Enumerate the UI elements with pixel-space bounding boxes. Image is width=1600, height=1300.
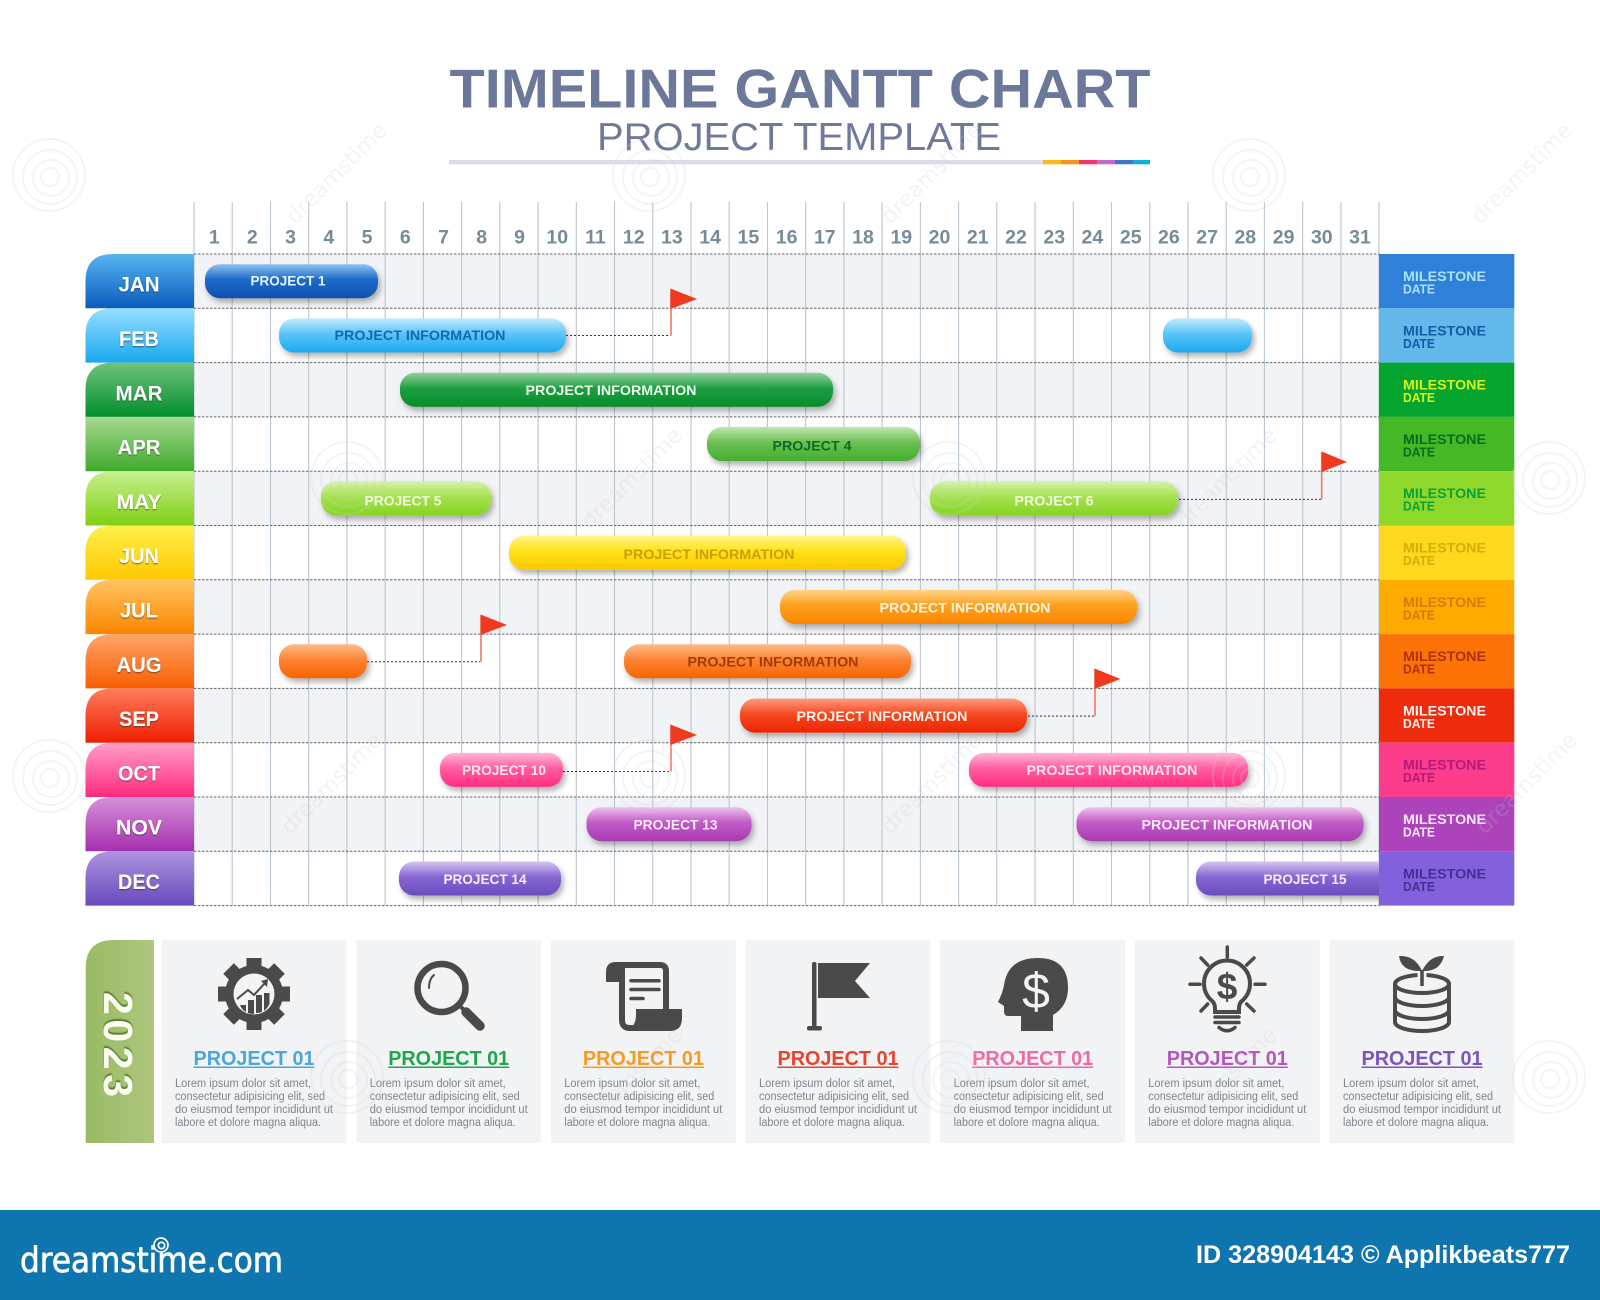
bar: july project information [780, 590, 1137, 624]
description: consectetur adipisicing elit, sed [564, 1091, 714, 1103]
month tab: jan: JAN [118, 274, 160, 297]
milestone: oct [1379, 743, 1514, 797]
month tab: feb [86, 308, 194, 363]
day numbers: 4 [323, 226, 334, 248]
month tab: oct: OCT [118, 762, 160, 785]
day numbers: 6 [400, 226, 411, 248]
bar: october project information: PROJECT INFORMATION [1026, 762, 1198, 778]
icon: head with dollar sign [998, 958, 1068, 1031]
month tab: jun: JUN [119, 545, 159, 568]
bar: august project information: PROJECT INFORMATION [688, 654, 858, 670]
day numbers: 24 [1082, 226, 1103, 248]
bar: september project information [740, 699, 1027, 733]
day numbers: 28 [1234, 226, 1256, 248]
milestone: may [1379, 471, 1514, 526]
description [370, 1078, 528, 1129]
heading: PROJECT 01 [388, 1047, 509, 1070]
milestone: may: DATE [1403, 500, 1435, 514]
project card 1 [162, 940, 346, 1143]
bar: july project information: PROJECT INFORMATION [880, 599, 1050, 615]
heading: PROJECT 01 [778, 1047, 898, 1070]
bar: project 10 [440, 753, 563, 787]
month tab: aug: AUG [116, 654, 162, 677]
milestone: jul: DATE [1403, 608, 1435, 622]
bar: march project information [400, 373, 833, 407]
project card 2 [356, 940, 541, 1143]
day numbers: 26 [1158, 226, 1180, 248]
title block [449, 58, 1150, 164]
day numbers: 19 [890, 226, 912, 248]
bar: august short [279, 644, 367, 678]
milestone: oct: MILESTONE [1403, 758, 1486, 773]
month tab: jun [86, 526, 194, 580]
bar: october project information [969, 753, 1248, 787]
month tab: mar [86, 363, 194, 417]
day numbers: 27 [1196, 226, 1218, 248]
watermark overlay: dreamstime [877, 728, 988, 839]
month tab: feb: FEB [119, 328, 159, 351]
bar: project 1 [205, 264, 378, 298]
milestone: sep: DATE [1403, 717, 1435, 731]
watermark overlay: dreamstime [1467, 118, 1578, 229]
day numbers: 1 [209, 226, 220, 248]
title underline [449, 160, 1150, 164]
milestone: dec: DATE [1403, 880, 1435, 894]
day numbers [209, 226, 1371, 248]
milestone: jun: DATE [1403, 554, 1435, 568]
milestone: jan: MILESTONE [1403, 269, 1486, 284]
bar: february project information: PROJECT INFORMATION [334, 327, 506, 343]
project card 4 [746, 940, 930, 1143]
heading: PROJECT 01 [194, 1047, 314, 1070]
description [1343, 1078, 1502, 1129]
month tab: sep [86, 688, 194, 743]
milestone: feb: DATE [1403, 337, 1435, 351]
milestone: may: MILESTONE [1403, 486, 1486, 501]
month tab: jul: JUL [120, 600, 158, 622]
icon: magnifying glass [418, 964, 480, 1026]
description: do eiusmod tempor incididunt ut [1148, 1104, 1307, 1116]
description: labore et dolore magna aliqua. [175, 1117, 321, 1129]
milestone: aug: DATE [1403, 663, 1435, 677]
day numbers: 7 [438, 226, 449, 248]
milestone: mar: DATE [1403, 391, 1435, 405]
day numbers: 16 [776, 226, 798, 248]
day numbers: 22 [1005, 226, 1027, 248]
bar: project 13 [586, 807, 752, 841]
bar: project 10: PROJECT 10 [462, 762, 546, 778]
milestone: dec: MILESTONE [1403, 866, 1486, 881]
bar: project 4 [707, 427, 920, 461]
description: Lorem ipsum dolor sit amet, [759, 1078, 895, 1090]
description: do eiusmod tempor incididunt ut [954, 1104, 1112, 1116]
icon: gear with chart [218, 958, 290, 1030]
month tab: apr: APR [118, 437, 160, 460]
bar: project 4: PROJECT 4 [772, 438, 852, 454]
description: labore et dolore magna aliqua. [564, 1117, 710, 1129]
month tab: apr [86, 417, 194, 471]
bar: project 5: PROJECT 5 [364, 492, 442, 508]
watermark overlay: dreamstime [277, 728, 388, 839]
bar: november project information [1076, 807, 1364, 841]
description: do eiusmod tempor incididunt ut [759, 1104, 918, 1116]
bar: march project information: PROJECT INFORMATION [526, 382, 696, 398]
bar: project 13: PROJECT 13 [634, 816, 718, 832]
heading: PROJECT 01 [1167, 1047, 1288, 1070]
description [1148, 1078, 1307, 1129]
milestone flag: august [367, 614, 507, 662]
day numbers: 30 [1311, 226, 1333, 248]
milestone: aug: MILESTONE [1403, 649, 1486, 664]
description: consectetur adipisicing elit, sed [759, 1091, 909, 1103]
heading: PROJECT 01 [972, 1047, 1093, 1070]
watermark overlay: dreamstime [1172, 1023, 1283, 1134]
milestone: nov: MILESTONE [1403, 812, 1486, 827]
milestone: jan: DATE [1403, 282, 1435, 296]
watermark overlay: dreamstime [1172, 423, 1283, 534]
milestone: jul: MILESTONE [1403, 595, 1486, 610]
description: labore et dolore magna aliqua. [1343, 1117, 1489, 1129]
milestone flag: may [1179, 452, 1347, 499]
bar: project 15 [1196, 862, 1396, 896]
milestone: mar [1379, 363, 1514, 417]
day numbers: 3 [285, 226, 296, 248]
day numbers: 12 [623, 226, 645, 248]
milestone: jun: MILESTONE [1403, 540, 1486, 556]
milestone: apr: MILESTONE [1403, 432, 1486, 447]
day numbers: 15 [738, 226, 759, 248]
month tab: jan [86, 254, 194, 308]
footer bar [0, 1210, 1600, 1300]
day numbers: 9 [514, 226, 525, 248]
year panel: 2023 [95, 992, 141, 1097]
project card 7 [1330, 940, 1514, 1143]
icon: coin stack with sprout [1395, 956, 1449, 1031]
day numbers: 29 [1273, 226, 1295, 248]
milestone: dec [1379, 851, 1514, 906]
heading: PROJECT 01 [583, 1047, 704, 1070]
bar: project 1: PROJECT 1 [250, 273, 326, 289]
bar: november project information: PROJECT INFORMATION [1142, 816, 1312, 832]
icon: flag [807, 962, 870, 1030]
icon: paper scroll [606, 962, 682, 1031]
project card 5 [940, 940, 1125, 1143]
watermark overlay: dreamstime [1472, 728, 1583, 839]
bar: february project information [279, 318, 566, 352]
month tab: nov: NOV [116, 817, 162, 840]
month tab: aug [86, 634, 194, 688]
description: Lorem ipsum dolor sit amet, [954, 1078, 1090, 1090]
heading: PROJECT 01 [1362, 1047, 1482, 1070]
description: do eiusmod tempor incididunt ut [564, 1104, 723, 1116]
description: Lorem ipsum dolor sit amet, [1148, 1078, 1284, 1090]
day numbers: 10 [546, 226, 568, 248]
month tab: dec: DEC [118, 871, 160, 894]
milestone: feb [1379, 308, 1514, 363]
milestone: sep [1379, 688, 1514, 743]
icon: light bulb with dollar sign [1190, 947, 1265, 1031]
month tab: may: MAY [116, 491, 162, 514]
title: TIMELINE GANTT CHART [450, 58, 1150, 120]
year panel [86, 940, 154, 1143]
day numbers: 11 [585, 226, 606, 248]
milestone flag: february [566, 288, 697, 336]
day numbers: 18 [852, 226, 874, 248]
milestone: apr [1379, 417, 1514, 471]
description: consectetur adipisicing elit, sed [1343, 1091, 1493, 1103]
milestone: nov [1379, 797, 1514, 851]
icon: light bulb with dollar sign: $ [1217, 966, 1238, 1007]
month tab: jul [86, 580, 194, 634]
description: labore et dolore magna aliqua. [370, 1117, 516, 1129]
bar: august project information [624, 644, 911, 678]
subtitle: PROJECT TEMPLATE [597, 116, 1001, 159]
milestone: jul [1379, 580, 1514, 634]
milestone: aug [1379, 634, 1514, 688]
description: labore et dolore magna aliqua. [954, 1117, 1100, 1129]
description: do eiusmod tempor incididunt ut [1343, 1104, 1502, 1116]
milestone flag: october [563, 724, 697, 772]
description [954, 1078, 1112, 1129]
bar: project 14: PROJECT 14 [444, 871, 527, 887]
watermark overlay [13, 118, 1585, 1134]
day numbers: 8 [476, 226, 487, 248]
milestone: oct: DATE [1403, 771, 1435, 785]
month tab: may [86, 471, 194, 526]
milestone: apr: DATE [1403, 445, 1435, 459]
month tab: oct [86, 743, 194, 797]
description: Lorem ipsum dolor sit amet, [175, 1078, 311, 1090]
footer logo spiral [154, 1238, 168, 1252]
bar: project 5 [321, 481, 491, 515]
project card 3 [551, 940, 736, 1143]
day numbers: 2 [247, 226, 258, 248]
bar: project 14 [399, 862, 561, 896]
day numbers: 25 [1120, 226, 1142, 248]
day numbers: 13 [661, 226, 683, 248]
watermark overlay: dreamstime [877, 118, 988, 229]
description: labore et dolore magna aliqua. [1148, 1117, 1294, 1129]
milestone: sep: MILESTONE [1403, 703, 1486, 718]
bar: project 6: PROJECT 6 [1014, 492, 1094, 508]
milestone: jan [1379, 254, 1514, 308]
day numbers: 17 [814, 226, 836, 248]
milestone: mar: MILESTONE [1403, 378, 1486, 393]
description: Lorem ipsum dolor sit amet, [564, 1078, 700, 1090]
row backgrounds [194, 254, 1379, 851]
description: do eiusmod tempor incididunt ut [370, 1104, 528, 1116]
gantt chart [86, 202, 1514, 906]
bar: project 6 [930, 481, 1178, 515]
project card 6 [1135, 940, 1320, 1143]
milestone: jun [1379, 526, 1514, 580]
bar: september project information: PROJECT INFORMATION [796, 708, 968, 724]
icon: head with dollar sign: $ [1022, 963, 1050, 1019]
description: consectetur adipisicing elit, sed [370, 1091, 520, 1103]
description: Lorem ipsum dolor sit amet, [370, 1078, 506, 1090]
month tab: dec [86, 851, 194, 906]
day numbers: 20 [929, 226, 950, 248]
milestone: nov: DATE [1403, 826, 1435, 840]
day numbers: 14 [699, 226, 721, 248]
description [564, 1078, 723, 1129]
month tab: sep: SEP [119, 708, 159, 731]
month tab: nov [86, 797, 194, 851]
description: do eiusmod tempor incididunt ut [175, 1104, 334, 1116]
description: labore et dolore magna aliqua. [759, 1117, 905, 1129]
bar: june project information: PROJECT INFORMATION [624, 546, 794, 562]
milestone: feb: MILESTONE [1403, 323, 1486, 338]
footer logo text: dreamstime.com [20, 1241, 283, 1281]
watermark overlay: dreamstime [577, 423, 688, 534]
day numbers: 23 [1043, 226, 1065, 248]
bar: project 15: PROJECT 15 [1264, 871, 1347, 887]
milestone flag: september [1028, 668, 1120, 716]
month tab: mar: MAR [116, 382, 162, 405]
description: consectetur adipisicing elit, sed [954, 1091, 1104, 1103]
bar: june project information [509, 536, 906, 570]
watermark overlay: dreamstime [282, 118, 393, 229]
description: consectetur adipisicing elit, sed [175, 1091, 325, 1103]
description: consectetur adipisicing elit, sed [1148, 1091, 1298, 1103]
day numbers: 5 [362, 226, 373, 248]
day numbers: 21 [967, 226, 989, 248]
bar: february short [1163, 318, 1252, 352]
description [759, 1078, 918, 1129]
description [175, 1078, 334, 1129]
footer credit: ID 328904143 © Applikbeats777 [1196, 1241, 1570, 1269]
day numbers: 31 [1349, 226, 1371, 248]
watermark overlay: dreamstime [577, 1023, 688, 1134]
description: Lorem ipsum dolor sit amet, [1343, 1078, 1479, 1090]
